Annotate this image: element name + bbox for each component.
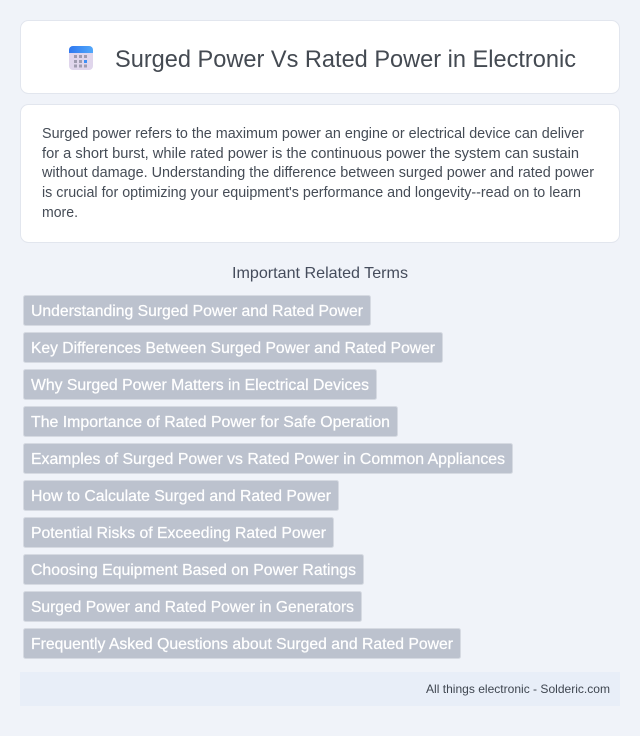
term 6: How to Calculate Surged and Rated Power <box>31 488 332 505</box>
list of related terms <box>24 296 512 658</box>
term 4: The Importance of Rated Power for Safe Operation <box>31 414 390 431</box>
term 6 <box>24 480 338 510</box>
text block: introduction: is crucial for optimizing your equipment's performance and longevity--read on to learn <box>42 185 581 201</box>
term 1 <box>24 296 370 326</box>
term 8 <box>24 554 364 584</box>
term 7 <box>24 518 334 548</box>
term 2: Key Differences Between Surged Power and Rated Power <box>31 340 436 357</box>
term 5: Examples of Surged Power vs Rated Power in Common Appliances <box>31 451 505 468</box>
term 7: Potential Risks of Exceeding Rated Power <box>31 525 327 542</box>
term 1: Understanding Surged Power and Rated Power <box>31 303 364 320</box>
icon: calendar <box>69 46 93 70</box>
term 4 <box>24 406 398 436</box>
term 5 <box>24 444 512 474</box>
term 8: Choosing Equipment Based on Power Ratings <box>31 562 356 579</box>
text block: introduction: without damage. Understanding the difference between surged power and rated power <box>41 165 594 181</box>
text block: introduction: for a short burst, while rated power is the continuous power the system can sustain <box>42 146 579 162</box>
panel: title header <box>20 20 620 94</box>
term 2 <box>24 332 442 362</box>
term 10: Frequently Asked Questions about Surged and Rated Power <box>31 636 454 653</box>
term 9: Surged Power and Rated Power in Generators <box>31 599 354 616</box>
text block: introduction: more. <box>42 205 78 221</box>
footer <box>20 672 620 706</box>
term 3 <box>24 370 376 400</box>
text block: introduction <box>41 126 594 221</box>
footer text: All things electronic - Solderic.com <box>426 682 610 696</box>
heading: important related terms: Important Related Terms <box>232 265 408 282</box>
term 10 <box>24 628 460 658</box>
title: Surged Power Vs Rated Power in Electronic <box>115 46 576 73</box>
term 3: Why Surged Power Matters in Electrical Devices <box>31 377 369 394</box>
term 9 <box>24 592 362 622</box>
text block: introduction: Surged power refers to the maximum power an engine or electrical device can deliver <box>42 126 584 142</box>
panel: introduction <box>20 104 620 242</box>
